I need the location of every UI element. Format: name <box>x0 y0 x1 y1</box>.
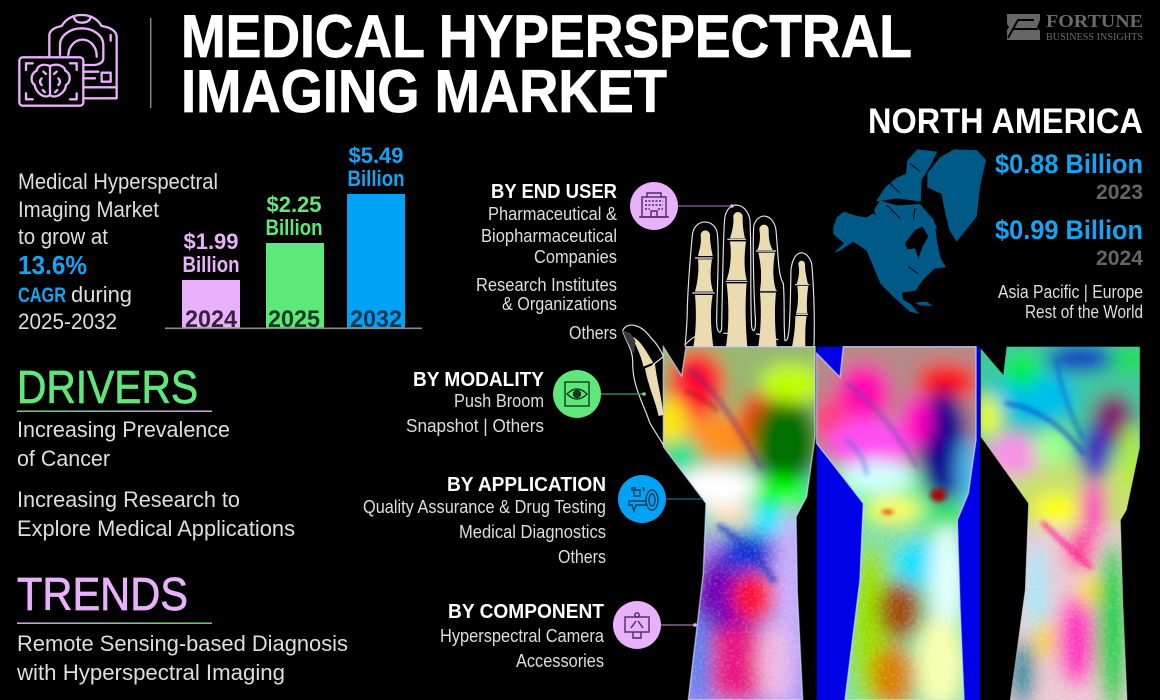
icon: building <box>630 182 678 230</box>
panel: north america <box>833 102 1143 322</box>
panel: drivers: DRIVERS <box>17 361 198 413</box>
header divider <box>150 18 151 108</box>
text: market growth summary: CAGR <box>18 284 66 307</box>
segment: by component: Accessories <box>516 651 604 671</box>
logo <box>1007 11 1143 43</box>
text: market growth summary: to grow at <box>18 224 108 249</box>
outline: hand image two <box>817 347 976 700</box>
segment: by end user: Research Institutes <box>476 275 617 295</box>
panel: drivers: Increasing Prevalence <box>17 417 230 442</box>
bar chart: $1.99 <box>183 229 239 254</box>
icon: scanner and brain <box>19 15 117 106</box>
text: market growth summary: 13.6% <box>18 250 87 280</box>
bar chart: 2032 <box>350 306 402 333</box>
map: north america <box>833 149 986 314</box>
segment: by end user <box>476 181 618 343</box>
panel: north america: 2024 <box>1096 247 1143 270</box>
segment: by end user: Biopharmaceutical <box>481 226 617 246</box>
panel: trends: TRENDS <box>17 568 188 620</box>
panel: drivers: Explore Medical Applications <box>17 516 295 541</box>
panel: trends: Remote Sensing-based Diagnosis <box>17 631 348 656</box>
panel: drivers: Increasing Research to <box>17 487 240 512</box>
connector: component <box>661 623 697 627</box>
segment: by application: Quality Assurance & Drug Testing <box>363 497 606 517</box>
panel: north america: 2023 <box>1096 181 1143 204</box>
panel: drivers: of Cancer <box>17 446 110 471</box>
panel: hand image one <box>664 346 815 700</box>
icon: camera display <box>613 601 661 649</box>
panel: hand image three <box>963 327 1160 700</box>
text: market growth summary: during <box>71 282 132 307</box>
segment: by component <box>440 601 605 671</box>
bar chart: 2024 <box>185 306 238 333</box>
logo: FORTUNE <box>1046 11 1143 31</box>
segment: by end user: Companies <box>534 247 617 267</box>
panel: north america: NORTH AMERICA <box>868 102 1143 141</box>
bar chart: Billion <box>348 166 404 191</box>
connector: modality <box>601 392 646 396</box>
segment: by application <box>363 474 606 567</box>
bar chart: Billion <box>266 215 322 240</box>
segment: by modality: Snapshot | Others <box>406 416 544 436</box>
bar chart: 2025 <box>268 306 320 333</box>
text: market growth summary <box>18 169 218 334</box>
segment: by end user: Pharmaceutical & <box>488 204 617 224</box>
panel: trends: with Hyperspectral Imaging <box>16 660 285 685</box>
illustration: hand skeleton <box>623 205 814 445</box>
segment: by application: Medical Diagnostics <box>459 522 606 542</box>
panel: north america: Asia Pacific | Europe <box>998 282 1143 302</box>
image: hyperspectral hands <box>662 344 1140 700</box>
text: market growth summary: 2025-2032 <box>18 309 117 334</box>
segment: by application: BY APPLICATION <box>447 474 606 496</box>
segment: by component: Hyperspectral Camera <box>440 626 605 646</box>
bar chart: Billion <box>182 252 240 277</box>
panel: north america: $0.99 Billion <box>995 215 1143 245</box>
segment: by end user: BY END USER <box>491 181 618 203</box>
panel: drivers <box>17 361 295 541</box>
title: MEDICAL HYPERSPECTRAL <box>181 3 912 70</box>
segment: by end user: & Organizations <box>502 294 617 314</box>
text: market growth summary: Imaging Market <box>18 197 159 222</box>
logo: BUSINESS INSIGHTS <box>1046 32 1143 43</box>
icon: eye scan <box>553 370 601 418</box>
segment: by modality: BY MODALITY <box>413 369 545 391</box>
connector: application <box>666 498 703 500</box>
segment: by modality <box>406 369 545 436</box>
title: IMAGING MARKET <box>181 58 667 125</box>
panel: hand image two <box>816 346 976 700</box>
connector: end user <box>678 204 734 208</box>
outline: hand image one <box>663 347 815 700</box>
segment: by application: Others <box>558 547 606 567</box>
text: market growth summary: Medical Hyperspectral <box>18 169 218 194</box>
bar chart <box>165 143 422 333</box>
segment: by end user: Others <box>569 323 617 343</box>
title <box>181 3 912 125</box>
bar chart: $5.49 <box>348 143 404 168</box>
segment: by modality: Push Broom <box>454 391 544 411</box>
segment: by component: BY COMPONENT <box>448 601 604 623</box>
bar chart: $2.25 <box>266 192 322 217</box>
icon: medical scanner <box>618 475 666 523</box>
panel: north america: $0.88 Billion <box>995 149 1143 179</box>
panel: north america: Rest of the World <box>1025 302 1143 322</box>
panel: trends <box>16 568 348 685</box>
